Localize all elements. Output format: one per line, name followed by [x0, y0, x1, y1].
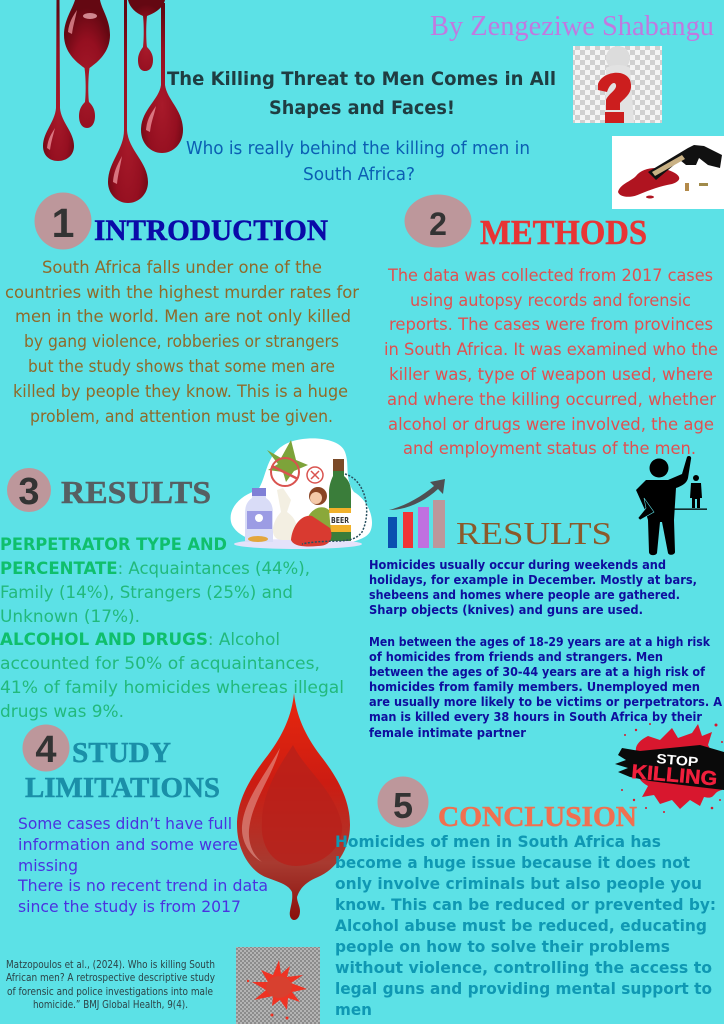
text: methods body: using autopsy records and forensic: [410, 290, 691, 310]
icon: stop killing badge: [615, 723, 724, 813]
text: conclusion body: know. This can be reduced or prevented by:: [335, 896, 716, 914]
text: results narrative: homicides from family members. Unemployed men: [369, 679, 700, 694]
text: citation: Matzopoulos et al., (2024). Who is killing South: [6, 960, 215, 971]
text: citation: African men? A retrospective descriptive study: [6, 973, 215, 984]
text: introduction body: killed by people they know. This is a huge: [13, 381, 348, 401]
text: limitations body: since the study is from 2017: [18, 897, 241, 916]
text: citation: of forensic and police investigations into male: [7, 987, 213, 998]
text: conclusion body: Alcohol abuse must be reduced, educating: [335, 917, 707, 935]
title: The Killing Threat to Men Comes in All: [167, 69, 556, 90]
text: limitations body: Some cases didn’t have full: [18, 814, 232, 833]
text: methods body: The data was collected from 2017 cases: [387, 265, 713, 285]
text: methods body: and employment status of the men.: [403, 438, 696, 458]
heading: study limitations: STUDY: [72, 737, 171, 769]
text: results narrative: [369, 557, 722, 740]
badge: 1: [34, 192, 92, 250]
badge: 2: 2: [429, 206, 447, 242]
text: conclusion body: men: [335, 1001, 372, 1019]
text: perpetrator type and alcohol findings: PERCENTATE: Acquaintances (44%),: [0, 558, 310, 578]
panel: introduction: [5, 192, 359, 426]
icon: man with knife: [636, 456, 707, 555]
badge: 4: [22, 724, 70, 772]
heading: study limitations: [25, 737, 220, 804]
text: methods body: killer was, type of weapon used, where: [389, 364, 713, 384]
text: perpetrator type and alcohol findings: Unknown (17%).: [0, 606, 140, 626]
heading: introduction: INTRODUCTION: [94, 214, 328, 247]
badge: 4: 4: [35, 729, 57, 771]
illustration: alcohol and drugs: [231, 438, 372, 549]
badge: 2: [404, 194, 472, 248]
text: perpetrator type and alcohol findings: Family (14%), Strangers (25%) and: [0, 582, 293, 602]
text: methods body: reports. The cases were from provinces: [389, 314, 713, 334]
text: introduction body: men in the world. Men are not only killed: [15, 306, 351, 326]
text: results narrative: Homicides usually occur during weekends and: [369, 557, 666, 572]
badge: 3: 3: [18, 471, 40, 513]
heading: results: RESULTS: [61, 474, 211, 510]
text: limitations body: information and some were: [18, 835, 238, 854]
panel: conclusion: [335, 776, 716, 1019]
icon: large blood drop: [237, 693, 350, 920]
badge: 1: 1: [52, 200, 74, 246]
illustration: alcohol and drugs: BEER: [331, 516, 349, 525]
title: Shapes and Faces!: [269, 98, 455, 119]
text: conclusion body: Homicides of men in South Africa has: [335, 833, 661, 851]
text: conclusion body: without violence, controlling the access to: [335, 959, 712, 977]
text: perpetrator type and alcohol findings: ALCOHOL AND DRUGS: Alcohol: [0, 629, 280, 649]
text: results narrative: shebeens and homes where people are gathered.: [369, 587, 680, 602]
panel: study limitations: [17, 724, 268, 916]
text: methods body: in South Africa. It was examined who the: [384, 339, 718, 359]
text: citation: homicide.” BMJ Global Health, 9(4).: [33, 1000, 188, 1011]
badge: 5: 5: [393, 785, 413, 826]
text: results narrative: holidays, for example in December. Mostly at bars,: [369, 572, 697, 587]
text: results narrative: Sharp objects (knives) and guns are used.: [369, 602, 643, 617]
text: conclusion body: legal guns and providing mental support to: [335, 980, 712, 998]
icon: stop killing badge: STOP: [656, 751, 699, 770]
byline: By Zengeziwe Shabangu: [430, 11, 714, 42]
text: perpetrator type and alcohol findings: drugs was 9%.: [0, 701, 124, 721]
icon: question mark figure: [573, 46, 662, 123]
text: introduction body: problem, and attention must be given.: [30, 406, 333, 426]
text: perpetrator type and alcohol findings: accounted for 50% of acquaintances,: [0, 653, 320, 673]
text: conclusion body: become a huge issue because it does not: [335, 854, 691, 872]
text: conclusion body: [335, 833, 716, 1019]
badge: 5: [378, 776, 428, 828]
badge: 3: [7, 468, 51, 513]
icon: hanging blood drops: [43, 0, 183, 203]
text: methods body: and where the killing occurred, whether: [387, 389, 716, 409]
text: limitations body: [17, 814, 268, 916]
text: perpetrator type and alcohol findings: 41% of family homicides whereas illegal: [0, 677, 344, 697]
heading: results: RESULTS: [456, 515, 612, 551]
panel: methods: [384, 194, 718, 458]
subtitle: Who is really behind the killing of men in: [186, 139, 530, 159]
text: limitations body: There is no recent trend in data: [17, 876, 268, 895]
text: conclusion body: people on how to solve their problems: [335, 938, 670, 956]
icon: gun and blood pool: [612, 136, 724, 209]
text: introduction body: but the study shows that some men are: [28, 356, 335, 376]
panel: results right: [369, 456, 722, 740]
text: introduction body: countries with the highest murder rates for: [5, 282, 359, 302]
icon: stop killing badge: KILLING: [631, 761, 718, 790]
text: methods body: alcohol or drugs were involved, the age: [388, 414, 714, 434]
text: results narrative: female intimate partner: [369, 725, 527, 740]
title: [167, 69, 556, 119]
text: perpetrator type and alcohol findings: [0, 534, 344, 721]
panel: results left: [0, 438, 372, 721]
text: limitations body: missing: [18, 856, 78, 875]
subtitle: [186, 139, 530, 185]
subtitle: South Africa?: [303, 165, 415, 185]
text: introduction body: South Africa falls under one of the: [42, 257, 322, 277]
heading: study limitations: LIMITATIONS: [25, 772, 220, 804]
text: methods body: [384, 265, 718, 458]
text: citation: [6, 960, 215, 1011]
text: conclusion body: only involve criminals but also people you: [335, 875, 702, 893]
heading: conclusion: CONCLUSION: [438, 801, 637, 833]
heading: methods: METHODS: [480, 213, 647, 252]
text: results narrative: of homicides from friends and strangers. Men: [369, 649, 663, 664]
text: introduction body: [5, 257, 359, 426]
text: perpetrator type and alcohol findings: PERPETRATOR TYPE AND: [0, 534, 227, 554]
chart: rising bars with arrow: [388, 479, 445, 548]
icon: red splat on checker: [236, 947, 320, 1024]
text: introduction body: by gang violence, robberies or strangers: [24, 331, 339, 351]
